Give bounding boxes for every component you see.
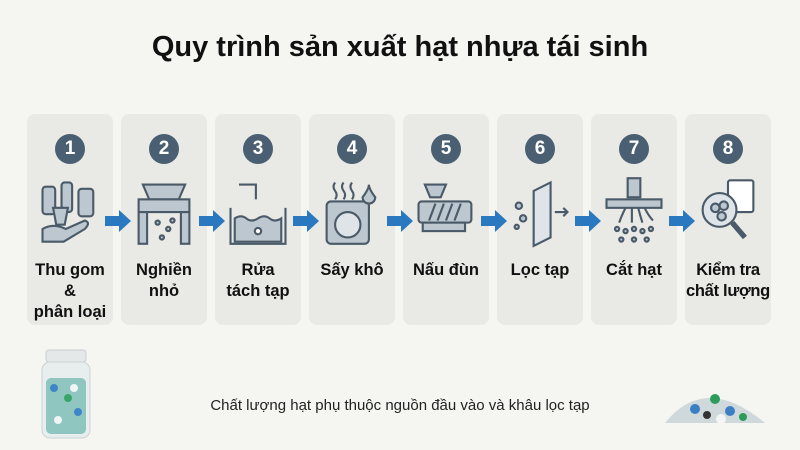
image: pile of pellets: [665, 394, 765, 423]
panel: step 8: [685, 114, 771, 325]
panel: step 1: phân loại: [34, 303, 106, 321]
arrow: [669, 210, 695, 232]
panel: step 1: &: [64, 282, 76, 300]
panel: step 4: 4: [347, 138, 357, 159]
panel: step 5: 5: [441, 138, 451, 159]
icon: magnifier with clipboard: [702, 179, 754, 240]
icon: extruder: [417, 184, 472, 232]
panel: step 5: Nấu đùn: [413, 261, 479, 279]
arrow: [387, 210, 413, 232]
icon: dryer: [326, 182, 376, 245]
panel: step 3: Rửa: [241, 261, 275, 279]
panel: step 2: Nghiền: [136, 261, 192, 279]
panel: step 3: [215, 114, 301, 325]
panel: step 1: [27, 114, 113, 325]
panel: step 3: 3: [253, 138, 263, 159]
icon: filter screen: [514, 180, 569, 248]
arrow: [481, 210, 507, 232]
panel: step 7: [591, 114, 677, 325]
arrow: [575, 210, 601, 232]
panel: step 3: tách tạp: [226, 282, 290, 300]
panel: step 2: 2: [159, 138, 169, 159]
footer text: Chất lượng hạt phụ thuộc nguồn đầu vào và khâu lọc tạp: [210, 397, 590, 414]
panel: step 6: [497, 114, 583, 325]
panel: step 4: Sấy khô: [320, 261, 384, 279]
panel: step 4: [309, 114, 395, 325]
arrow: [293, 210, 319, 232]
arrow: [105, 210, 131, 232]
icon: bottles and hand: [41, 181, 94, 243]
panel: step 1: Thu gom: [35, 261, 105, 279]
panel: step 5: [403, 114, 489, 325]
icon: pellet cutter: [605, 177, 663, 243]
panel: step 1: 1: [65, 138, 75, 159]
panel: step 2: nhỏ: [149, 282, 179, 300]
panel: step 6: Lọc tạp: [511, 261, 569, 279]
panel: step 7: Cắt hạt: [606, 261, 662, 279]
image: jar of pellets: [42, 350, 90, 438]
panel: step 8: chất lượng: [686, 282, 770, 300]
icon: washing tank: [229, 184, 287, 245]
panel: step 8: 8: [723, 138, 733, 159]
panel: step 7: 7: [629, 138, 639, 159]
panel: step 6: 6: [535, 138, 545, 159]
arrow: [199, 210, 225, 232]
title: Quy trình sản xuất hạt nhựa tái sinh: [152, 31, 648, 63]
icon: shredder: [138, 184, 190, 245]
panel: step 2: [121, 114, 207, 325]
panel: step 8: Kiểm tra: [696, 261, 760, 279]
